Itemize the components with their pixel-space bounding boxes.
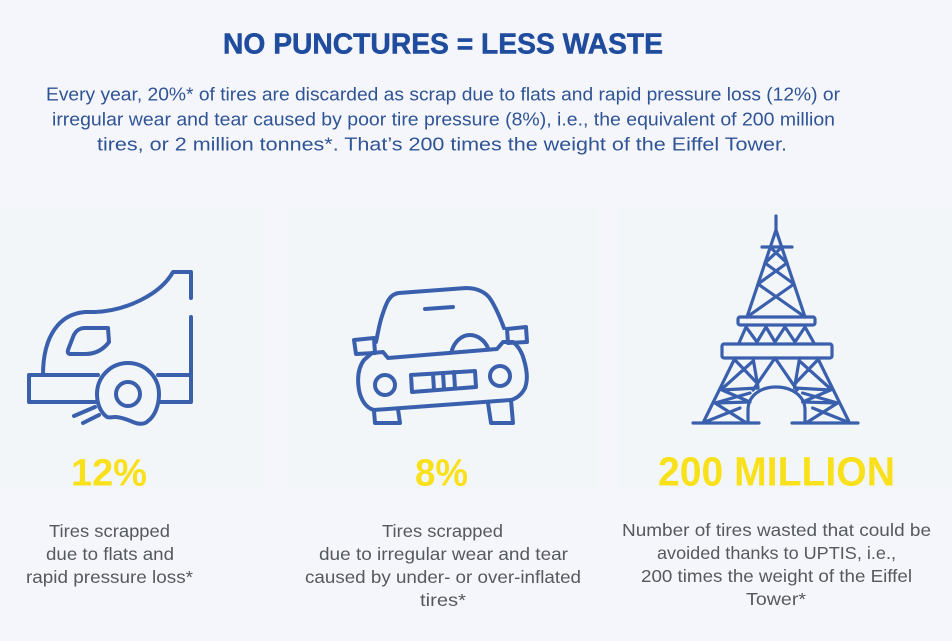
title: NO PUNCTURES = LESS WASTE	[223, 28, 663, 60]
caption: flats: due to flats and	[46, 544, 174, 564]
panel: flats	[0, 207, 265, 494]
caption: irregular wear: due to irregular wear and tear	[319, 544, 568, 564]
caption: irregular wear: caused by under- or over-inflated	[305, 567, 581, 587]
intro text: tires, or 2 million tonnes*. That’s 200 times the weight of the Eiffel Tower.	[97, 134, 787, 154]
caption: tires wasted: avoided thanks to UPTIS, i.e.,	[657, 543, 896, 563]
caption: irregular wear	[305, 521, 581, 610]
caption: flats: rapid pressure loss*	[26, 567, 193, 587]
stat: 12%: 12%	[71, 452, 147, 494]
stat: 200 million: 200 MILLION	[658, 448, 895, 494]
icon: car front view	[354, 288, 527, 423]
caption: flats	[26, 521, 193, 587]
panel: Eiffel Tower	[620, 207, 952, 494]
intro text	[46, 84, 840, 154]
icon: car with flat tire	[29, 272, 191, 424]
caption: tires wasted: Number of tires wasted that could be	[622, 520, 931, 540]
icon: Eiffel Tower	[693, 216, 858, 423]
caption: tires wasted: 200 times the weight of the Eiffel	[641, 566, 912, 586]
intro text: irregular wear and tear caused by poor tire pressure (8%), i.e., the equivalent of 200 million	[52, 108, 835, 130]
caption: irregular wear: tires*	[420, 590, 466, 610]
stat: 8%: 8%	[415, 452, 468, 494]
caption: irregular wear: Tires scrapped	[382, 521, 503, 541]
caption: tires wasted	[622, 520, 931, 609]
caption: tires wasted: Tower*	[746, 589, 806, 609]
caption: flats: Tires scrapped	[49, 521, 170, 541]
panel: irregular wear	[288, 207, 597, 494]
intro text: Every year, 20%* of tires are discarded as scrap due to flats and rapid pressure loss (12%) or	[46, 84, 840, 104]
